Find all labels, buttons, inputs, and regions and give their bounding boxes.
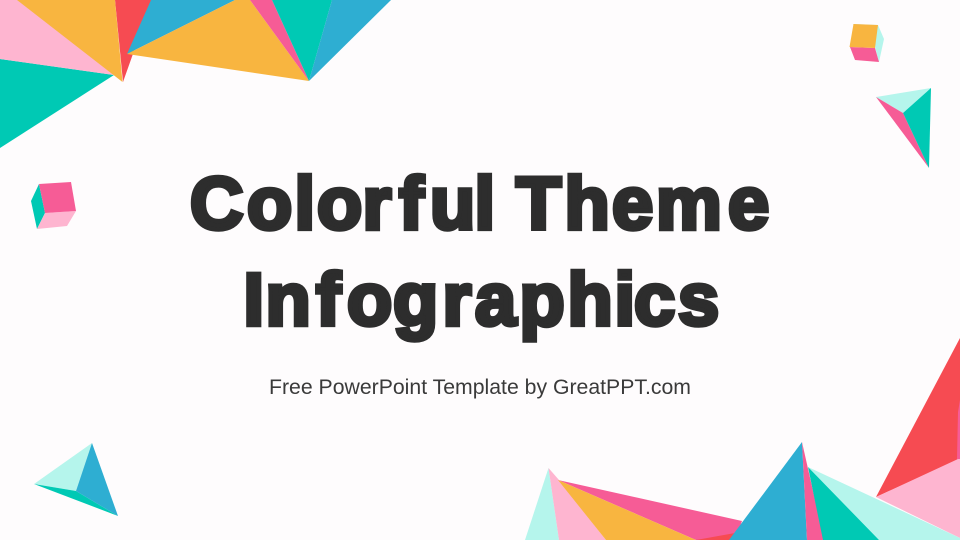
bottom triangle cluster xyxy=(525,338,960,540)
title: Infographics xyxy=(244,258,719,341)
cube left xyxy=(31,182,76,229)
title xyxy=(190,162,769,341)
pyramid top right xyxy=(876,88,931,168)
small cube top right xyxy=(850,24,884,62)
top-left triangle cluster xyxy=(0,0,391,148)
pyramid bottom left xyxy=(34,443,118,516)
title: Colorful Theme xyxy=(190,162,769,245)
subtitle: Free PowerPoint Template by GreatPPT.com xyxy=(269,376,691,399)
